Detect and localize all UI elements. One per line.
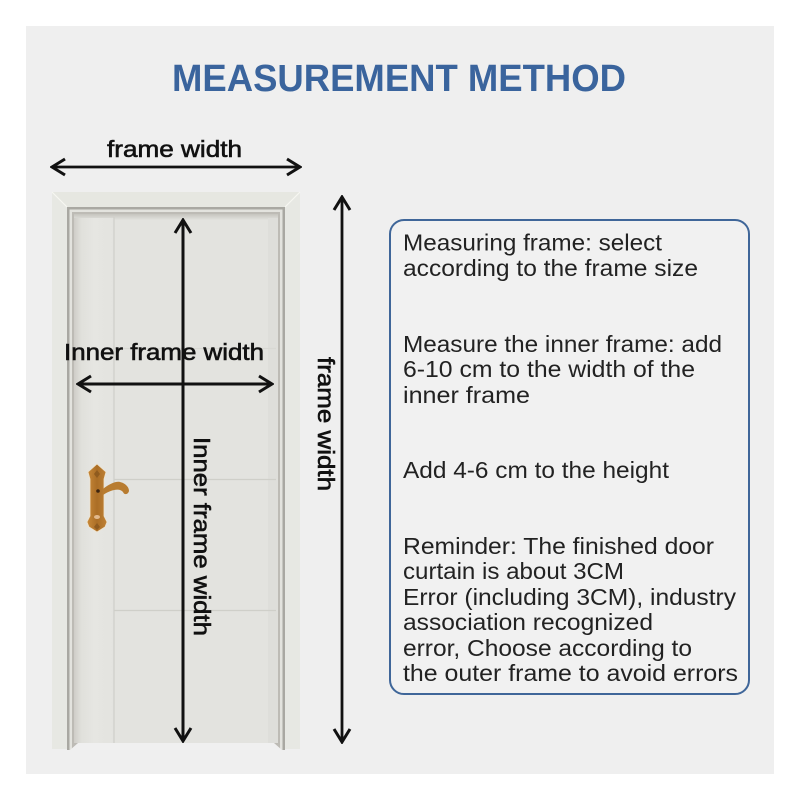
- text: reminder: association recognized: [403, 609, 653, 635]
- text: measure inner frame: 6-10 cm to the width of the: [403, 356, 695, 382]
- panel border: [390, 220, 749, 694]
- arrow: inner horizontal: [78, 382, 272, 386]
- arrow: inner vertical: [182, 220, 184, 741]
- text: reminder: error, Choose according to: [403, 635, 692, 661]
- arrow: top frame width: [52, 166, 300, 168]
- label: inner frame width: Inner frame width: [64, 339, 264, 365]
- text: measuring frame: [403, 230, 698, 281]
- text: measure inner frame: Measure the inner frame: add: [403, 331, 722, 357]
- icon: door handle: [87, 464, 129, 532]
- label: rotated inner frame width: Inner frame width: [189, 437, 215, 636]
- text: measure inner frame: [403, 331, 722, 408]
- panel: instructions: [390, 220, 749, 694]
- label: top frame width: frame width: [107, 136, 242, 162]
- door illustration: [52, 192, 300, 750]
- door frame top bevel: [52, 192, 300, 207]
- door inner jamb: [67, 207, 285, 750]
- text: measure inner frame: inner frame: [403, 382, 530, 408]
- arrow: right frame height: [341, 197, 343, 742]
- text: measuring frame: Measuring frame: select: [403, 230, 663, 256]
- door panel grooves: [114, 217, 276, 743]
- text: reminder: [403, 533, 738, 686]
- title: MEASUREMENT METHOD: [172, 58, 626, 100]
- text: reminder: Reminder: The finished door: [403, 533, 714, 559]
- text: reminder: the outer frame to avoid errors: [403, 660, 738, 686]
- door leaf: [76, 217, 276, 743]
- text: height: Add 4-6 cm to the height: [403, 457, 670, 483]
- door outer frame: [52, 192, 300, 749]
- door threshold: [70, 743, 282, 750]
- text: reminder: Error (including 3CM), industry: [403, 584, 737, 610]
- text: reminder: curtain is about 3CM: [403, 558, 624, 584]
- label: rotated frame width: frame width: [313, 357, 339, 491]
- text: measuring frame: according to the frame size: [403, 255, 698, 281]
